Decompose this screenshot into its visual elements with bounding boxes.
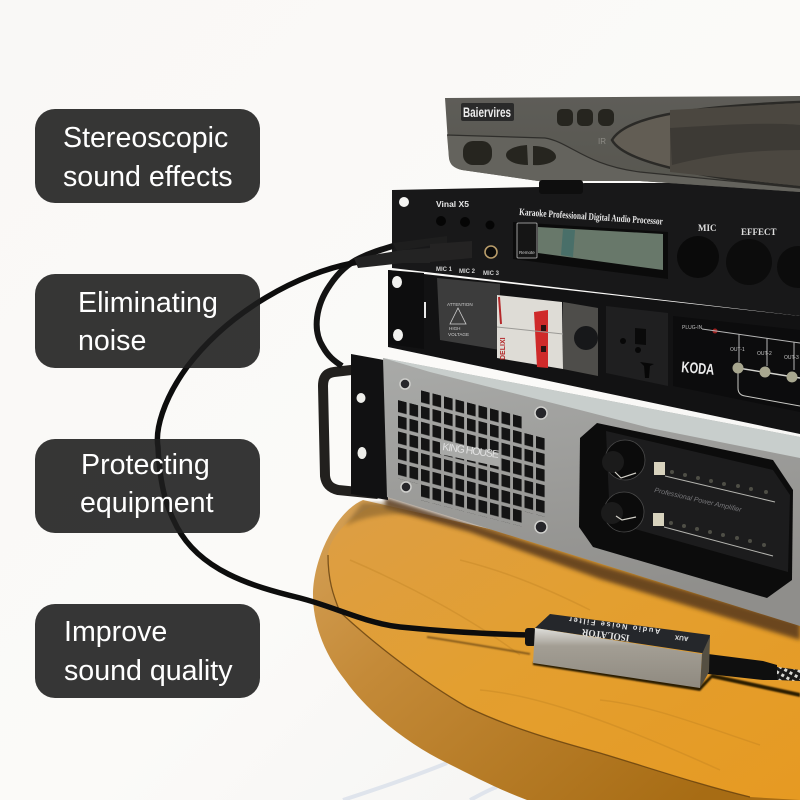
- knob ch1: [602, 440, 645, 480]
- table rim: [313, 500, 800, 800]
- brand badge: Baiervires: [463, 105, 511, 120]
- jacks: [436, 216, 494, 230]
- mic knob: [677, 223, 719, 278]
- mic labels: MIC 2: [459, 269, 476, 275]
- callout: eliminating noise: Eliminating: [78, 287, 218, 319]
- callout: stereoscopic sound effects: sound effects: [63, 161, 233, 193]
- top device: karaoke box: [445, 96, 800, 194]
- KODA panel: [673, 316, 800, 412]
- amplifier caption: Professional Power Amplifier: [654, 487, 743, 514]
- left strain relief: [525, 628, 536, 646]
- top face: [535, 614, 710, 654]
- push button: [574, 326, 598, 350]
- callout: improve sound quality: sound quality: [64, 655, 233, 687]
- main audio cable: [157, 241, 530, 635]
- dongle shadow: [533, 662, 800, 697]
- table top: [328, 506, 800, 800]
- callout: eliminating noise: noise: [78, 325, 146, 357]
- rack holes: [399, 197, 409, 207]
- unit body: [388, 270, 800, 434]
- ch2 meter: [664, 521, 773, 556]
- isolator dongle: [525, 614, 800, 697]
- mic knob: MIC: [698, 223, 716, 233]
- mic labels: MIC 1: [436, 267, 453, 273]
- ch1 meter: [665, 470, 775, 502]
- box buttons: [463, 109, 614, 165]
- knob ch2: [601, 492, 644, 532]
- circuit breaker: [497, 295, 563, 369]
- LCD display: Remote: [519, 250, 535, 255]
- KODA panel: OUT-3: [784, 355, 799, 361]
- device label: [568, 615, 689, 643]
- side face: [533, 628, 702, 688]
- box body: [445, 96, 800, 192]
- display window: [612, 102, 800, 187]
- front vent grid: [398, 384, 548, 533]
- mic labels: MIC 3: [483, 271, 500, 277]
- groove: [447, 135, 800, 188]
- power amplifier: [323, 354, 800, 626]
- handle shadow on table: [345, 503, 420, 526]
- music knob: [777, 246, 800, 288]
- KODA panel: PLUG-IN: [682, 325, 703, 331]
- callout: eliminating noise: [35, 274, 260, 368]
- callout: protecting equipment: Protecting: [81, 449, 210, 481]
- attention label: VOLTAGE: [448, 332, 469, 337]
- CH1 label: [654, 462, 665, 475]
- end cap: [700, 636, 710, 688]
- attention label: HIGH: [449, 326, 460, 331]
- LCD display: [513, 222, 668, 279]
- rim groove line: [328, 555, 750, 797]
- amp shadow on table: [385, 497, 800, 640]
- rack ear: [388, 270, 426, 349]
- amp handle: [323, 367, 378, 494]
- callout: protecting equipment: equipment: [80, 487, 214, 519]
- glass panel: [437, 278, 500, 350]
- callout: stereoscopic sound effects: Stereoscopic: [63, 122, 228, 154]
- callout: protecting equipment: [35, 439, 260, 533]
- callout: improve sound quality: [35, 604, 260, 698]
- brand label: Vinal X5: [436, 199, 469, 209]
- power socket: [606, 306, 668, 386]
- wood grain: [350, 560, 760, 770]
- processor body: [392, 183, 800, 316]
- audio processor rack unit: [392, 183, 800, 316]
- device label: AUX: [674, 633, 689, 642]
- callout: improve sound quality: Improve: [64, 616, 167, 648]
- amp faceplate: [383, 358, 800, 626]
- CH2 label: [653, 513, 664, 526]
- KODA panel: OUT-2: [757, 351, 772, 357]
- control window: [579, 423, 793, 598]
- amp top highlight band: [383, 358, 800, 458]
- attention label: ATTENTION: [447, 302, 473, 307]
- box foot: [539, 180, 583, 194]
- lower face: [447, 135, 800, 192]
- KODA panel: OUT-1: [730, 347, 745, 353]
- device label: ISOLATOR: [580, 626, 630, 643]
- plug barrel: [708, 654, 777, 680]
- model title: Karaoke Professional Digital Audio Processor: [519, 207, 664, 228]
- metal jack: [430, 241, 472, 262]
- decorative pale cables on floor: [343, 763, 497, 800]
- braided strain relief: [354, 248, 430, 268]
- effect knob: [726, 227, 777, 285]
- mic 3 jack: [485, 246, 497, 258]
- KODA panel: KODA: [681, 359, 715, 379]
- IR label: IR: [598, 137, 606, 146]
- callout: stereoscopic sound effects: [35, 109, 260, 203]
- screws: [400, 379, 547, 533]
- dongle cable shadow: [427, 637, 530, 654]
- mic labels: [436, 267, 500, 277]
- short mic cable: [317, 236, 447, 366]
- brand badge: [461, 103, 514, 121]
- brand: KING HOUSE: [442, 441, 500, 461]
- amp bracket: [351, 354, 388, 500]
- attention label: [447, 302, 473, 337]
- effect knob: EFFECT: [741, 227, 777, 237]
- device label: Audio Noise Filter: [568, 615, 661, 636]
- power protector rack unit: [388, 270, 800, 434]
- circuit breaker: DELIXI: [500, 337, 507, 360]
- braided cable end: [777, 667, 800, 681]
- round wooden table: [313, 497, 800, 800]
